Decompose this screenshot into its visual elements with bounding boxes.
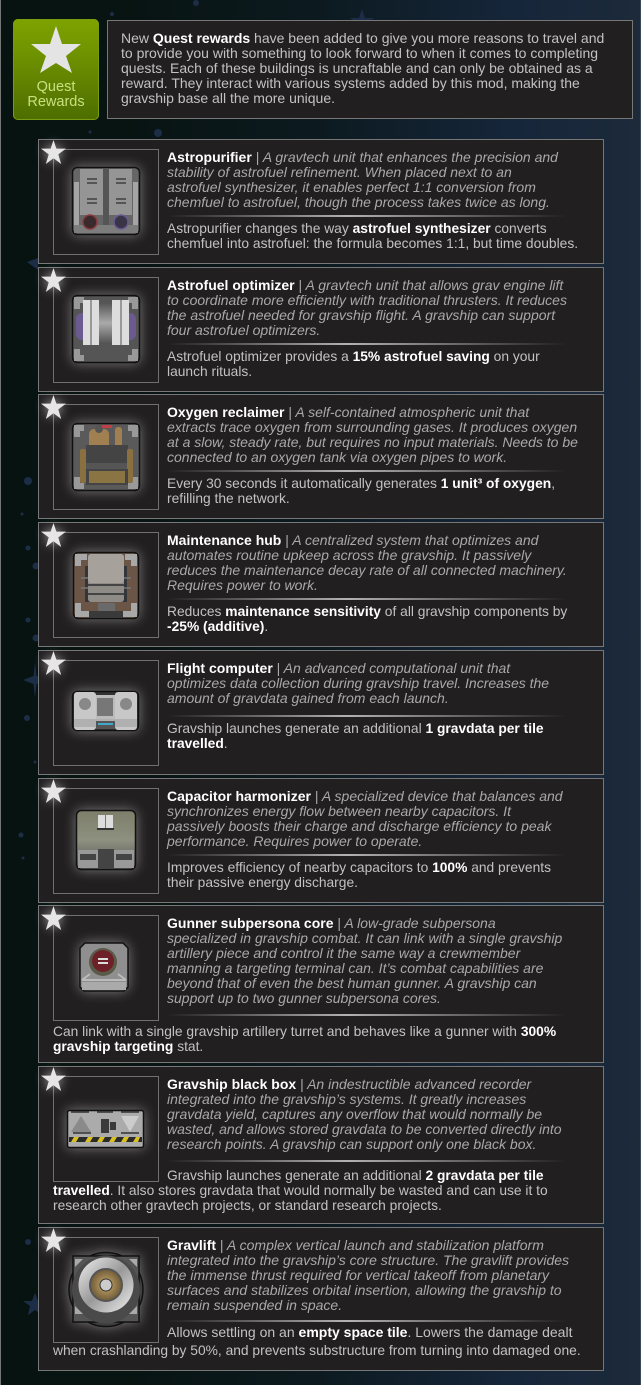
icon: flight computer xyxy=(64,684,146,738)
description: astrofuel synthesizer, it enables perfect 1:1 conversion from xyxy=(167,179,536,195)
intro text: to provide you with something to look forward to when it comes to completing xyxy=(121,45,598,61)
icon: star xyxy=(40,1066,68,1094)
effect text: gravship targeting stat. xyxy=(53,1039,203,1054)
description: the astrofuel needed for gravship flight. A gravship can support xyxy=(167,307,555,323)
description: Oxygen reclaimer | A self-contained atmospheric unit that xyxy=(167,404,529,420)
effect text xyxy=(53,1024,556,1054)
icon: star xyxy=(40,522,68,550)
description: beyond that of even the best human gunner. A gravship can xyxy=(167,975,537,991)
icon: gravship black box xyxy=(60,1102,152,1156)
description: four astrofuel optimizers. xyxy=(167,322,320,338)
effect text: Reduces maintenance sensitivity of all gravship components by xyxy=(167,604,567,619)
description: stability of astrofuel refinement. When placed next to an xyxy=(167,164,512,180)
badge label: Rewards xyxy=(27,94,85,110)
description xyxy=(167,404,578,465)
description: Astrofuel optimizer | A gravtech unit that allows grav engine lift xyxy=(167,277,563,293)
description: Gravship black box | An indestructible advanced recorder xyxy=(167,1076,531,1092)
effect text: their passive energy discharge. xyxy=(167,875,358,890)
description xyxy=(167,1237,569,1313)
effect text xyxy=(167,604,568,634)
quest rewards badge xyxy=(13,19,99,120)
description: Astropurifier | A gravtech unit that enhances the precision and xyxy=(167,149,558,165)
effect text xyxy=(167,349,540,379)
description xyxy=(166,788,563,849)
icon: star xyxy=(31,26,81,73)
description: integrated into the gravship’s core structure. The gravlift provides xyxy=(167,1252,569,1268)
icon: star xyxy=(40,1226,68,1255)
icon: star xyxy=(40,650,68,678)
description: artillery piece and control it the same way a crewmember xyxy=(167,945,520,961)
description: reduces the maintenance decay rate of all connected machinery. xyxy=(167,562,567,578)
effect text: Gravship launches generate an additional 2 gravdata per tile xyxy=(167,1168,544,1183)
description: Gravlift | A complex vertical launch and stabilization platform xyxy=(167,1237,544,1253)
description: Flight computer | An advanced computational unit that xyxy=(167,660,510,676)
description xyxy=(167,277,567,338)
description: chemfuel to astrofuel, though the process takes twice as long. xyxy=(167,194,550,210)
description xyxy=(167,915,562,1006)
icon: gravlift xyxy=(61,1244,151,1334)
intro text: gravship base all the more unique. xyxy=(121,90,335,106)
description: Requires power to work. xyxy=(167,577,318,593)
icon: star xyxy=(40,394,68,422)
effect text: -25% (additive). xyxy=(167,619,268,634)
description: wasted, and allows stored gravdata to be converted directly into xyxy=(167,1121,562,1137)
description: gravdata yield, captures any overflow that would normally be xyxy=(167,1106,542,1122)
description: optimizes data collection during gravship travel. Increases the xyxy=(167,675,549,691)
description: Maintenance hub | A centralized system that optimizes and xyxy=(167,532,538,548)
panel: oxygen reclaimer xyxy=(38,394,604,519)
intro panel xyxy=(107,20,633,119)
effect text: Every 30 seconds it automatically generates 1 unit³ of oxygen, xyxy=(167,476,555,491)
description: at a slow, steady rate, but requires no input materials. Needs to be xyxy=(167,434,578,450)
effect text xyxy=(167,721,544,751)
description: extracts trace oxygen from surrounding gases. It produces oxygen xyxy=(167,419,577,435)
panel: maintenance hub xyxy=(38,522,604,647)
effect text: Improves efficiency of nearby capacitors to 100% and prevents xyxy=(167,860,551,875)
panel: astropurifier xyxy=(38,139,604,264)
description: remain suspended in space. xyxy=(167,1297,342,1313)
intro text: quests. Each of these buildings is uncraftable and can only be obtained as a xyxy=(121,60,593,76)
icon: gunner subpersona core xyxy=(72,935,136,999)
description: to coordinate more efficiently with traditional thrusters. It reduces xyxy=(167,292,567,308)
panel: gunner subpersona core xyxy=(38,905,604,1063)
description xyxy=(167,660,549,706)
intro text xyxy=(121,30,604,106)
panel: astrofuel optimizer xyxy=(38,267,604,392)
effect text: refilling the network. xyxy=(167,491,290,506)
icon: star xyxy=(40,904,68,933)
effect text: launch rituals. xyxy=(167,364,252,379)
intro text: New Quest rewards have been added to give you more reasons to travel and xyxy=(121,30,604,46)
description: passively boosts their charge and discharge efficiency to peak xyxy=(167,818,551,834)
effect text: chemfuel into astrofuel: the formula becomes 1:1, but time doubles. xyxy=(167,236,578,251)
effect text: Gravship launches generate an additional 1 gravdata per tile xyxy=(167,721,544,736)
badge label: Quest xyxy=(37,79,75,95)
effect text: Can link with a single gravship artillery turret and behaves like a gunner with 300% xyxy=(53,1024,556,1039)
effect text xyxy=(167,860,551,890)
badge label xyxy=(27,79,85,110)
intro text: reward. They interact with various systems added by this mod, making the xyxy=(121,75,580,91)
description: integrated into the gravship’s systems. It greatly increases xyxy=(167,1091,526,1107)
description: specialized in gravship combat. It can link with a single gravship xyxy=(167,930,562,946)
icon: star xyxy=(40,266,68,295)
panel: flight computer xyxy=(38,650,604,775)
description xyxy=(167,149,558,210)
icon: capacitor harmonizer xyxy=(68,802,144,878)
effect text: Astropurifier changes the way astrofuel synthesizer converts xyxy=(167,221,547,236)
icon: astrofuel optimizer xyxy=(64,288,148,370)
effect text: Allows settling on an empty space tile. Lowers the damage dealt xyxy=(167,1324,572,1340)
description: Gunner subpersona core | A low-grade subpersona xyxy=(167,915,496,931)
panel: capacitor harmonizer xyxy=(38,778,604,903)
effect text xyxy=(167,221,578,251)
description: synchronizes energy flow between nearby capacitors. It xyxy=(167,803,511,819)
description: the immense thrust required for vertical takeoff from planetary xyxy=(167,1267,549,1283)
effect text xyxy=(167,476,555,506)
icon: maintenance hub xyxy=(66,544,146,626)
description: automates routine upkeep across the gravship. It passively xyxy=(167,547,531,563)
description: connected to an oxygen tank via oxygen pipes to work. xyxy=(167,449,507,465)
description xyxy=(167,532,567,593)
description xyxy=(167,1076,562,1152)
icon: oxygen reclaimer xyxy=(64,416,148,498)
panel: gravship black box xyxy=(38,1066,604,1224)
description: surfaces and stabilizes orbital insertion, allowing the gravship to xyxy=(167,1282,562,1298)
icon: star xyxy=(40,138,68,167)
panel: gravlift xyxy=(38,1227,604,1371)
effect text: Astrofuel optimizer provides a 15% astrofuel saving on your xyxy=(167,349,540,364)
effect text: travelled. It also stores gravdata that would normally be wasted and can use it to xyxy=(53,1183,548,1198)
description: manning a targeting terminal can. It’s combat capabilities are xyxy=(167,960,543,976)
effect text xyxy=(53,1168,548,1213)
effect text xyxy=(53,1324,581,1358)
effect text: when crashlanding by 50%, and prevents substructure from turning into damaged one. xyxy=(53,1343,581,1358)
effect text: travelled. xyxy=(167,736,228,751)
description: performance. Requires power to operate. xyxy=(167,833,422,849)
effect text: research other gravtech projects, or standard research projects. xyxy=(53,1198,442,1213)
description: support up to two gunner subpersona cores. xyxy=(167,990,441,1006)
icon: star xyxy=(40,778,68,806)
description: Capacitor harmonizer | A specialized device that balances and xyxy=(167,788,563,804)
icon: astropurifier xyxy=(64,160,148,242)
description: amount of gravdata gained from each launch. xyxy=(167,690,449,706)
description: research points. A gravship can support only one black box. xyxy=(167,1136,536,1152)
